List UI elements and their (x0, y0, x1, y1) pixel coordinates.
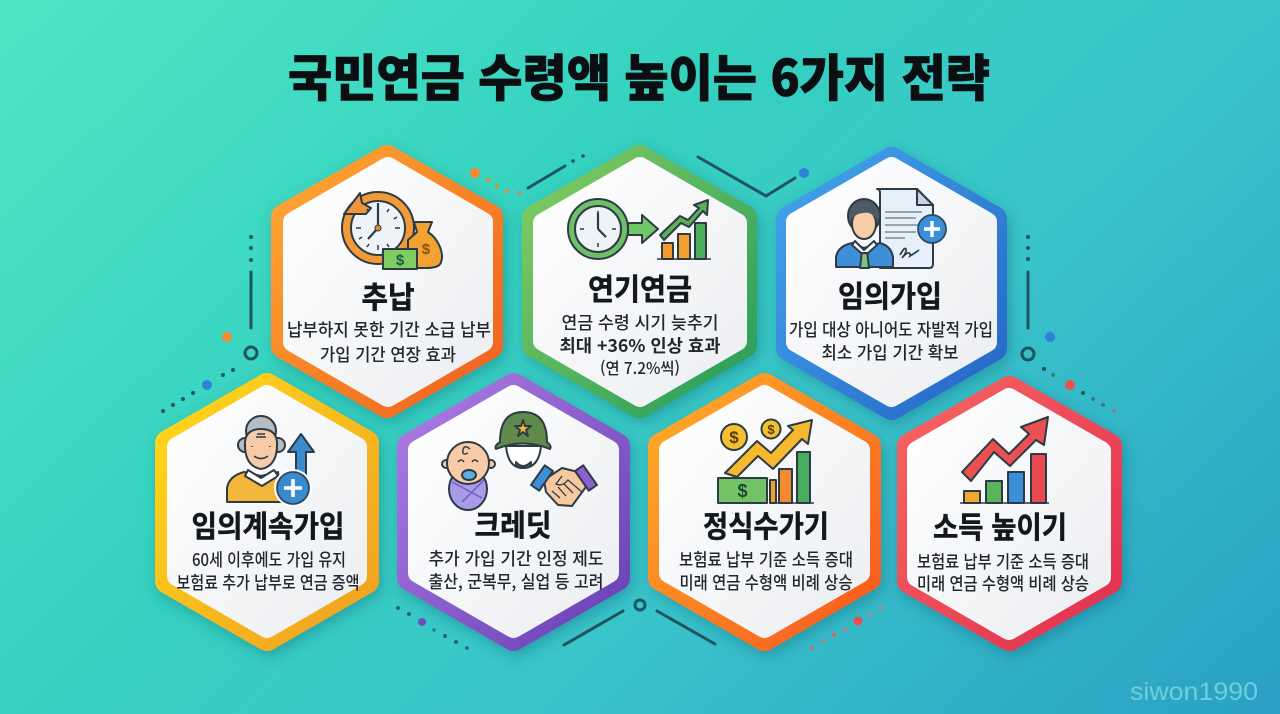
icon: clock with back arrow and money: $ (422, 241, 431, 258)
text: 임의가입 description: 가입 대상 아니어도 자발적 가입 (789, 317, 993, 342)
icon: clock, arrow and rising chart (568, 199, 711, 259)
hexagon frame: yellow (168, 386, 366, 638)
heading: 연기연금: 연기연금 (588, 265, 692, 309)
hexagon frame: orange (284, 158, 490, 405)
text: 정식수가기 description: 미래 연금 수형액 비례 상승 (680, 570, 852, 595)
hexagon frame: green (535, 158, 744, 405)
hexagon frame: orange (661, 386, 868, 638)
text: 크레딧 description (428, 546, 604, 594)
panel: 정식수가기 (661, 386, 868, 638)
text: 소득 높이기 description: 보험료 납부 기준 소득 증대 (917, 549, 1089, 574)
heading: 크레딧: 크레딧 (474, 501, 552, 545)
text: 연기연금 description: 연금 수령 시기 늦추기 (562, 310, 718, 335)
watermark: siwon1990 (1130, 678, 1258, 706)
icon: clock with back arrow and money: $ (396, 252, 405, 269)
text: 연기연금 description: 최대 +36% 인상 효과 (560, 333, 720, 358)
icon: elderly person with up arrow (227, 416, 314, 507)
text: 소득 높이기 description (917, 549, 1089, 596)
hexagon frame: purple (410, 386, 617, 638)
icon: coins, banknote and rising chart (718, 420, 814, 503)
text: 임의가입 description: 최소 가입 기간 확보 (822, 340, 958, 365)
panel: 소득 높이기 (910, 389, 1109, 638)
heading: 추납: 추납 (362, 273, 414, 317)
text: 임의가입 description (789, 317, 993, 365)
heading: 임의계속가입: 임의계속가입 (192, 502, 344, 546)
text: 추납 description: 납부하지 못한 기간 소급 납부 (287, 317, 491, 342)
icon: coins, banknote and rising chart: $ (737, 481, 748, 501)
text: 연기연금 description: (연 7.2%씩) (600, 355, 680, 379)
heading: 임의가입: 임의가입 (838, 272, 942, 316)
icon: clock with back arrow and money (342, 192, 442, 269)
text: 임의계속가입 description: 60세 이후에도 가입 유지 (192, 547, 346, 572)
text: 정식수가기 description (679, 547, 853, 595)
icon: coins, banknote and rising chart: $ (729, 428, 739, 447)
text: 연기연금 description (560, 310, 720, 379)
icon: baby, military helmet and handshake (442, 412, 597, 510)
text: 크레딧 description: 출산, 군복무, 실업 등 고려 (428, 569, 604, 594)
panel: 연기연금 (535, 158, 744, 405)
text: 정식수가기 description: 보험료 납부 기준 소득 증대 (679, 547, 853, 572)
text: 추납 description (287, 317, 491, 367)
text: 크레딧 description: 추가 가입 기간 인정 제도 (428, 546, 604, 571)
hexagon frame: blue (789, 160, 994, 407)
panel: 임의계속가입 (168, 386, 366, 638)
hexagon frame: red (910, 389, 1109, 638)
text: 임의계속가입 description: 보험료 추가 납부로 연금 증액 (176, 570, 360, 595)
panel: 임의가입 (789, 160, 994, 407)
heading: 소득 높이기: 소득 높이기 (933, 503, 1067, 547)
text: 추납 description: 가입 기간 연장 효과 (320, 342, 456, 367)
icon: person with signed document (836, 189, 946, 268)
panel: 추납 (284, 158, 491, 405)
heading: 정식수가기: 정식수가기 (703, 502, 829, 546)
decorative dots and lines (161, 154, 1116, 650)
panel: 크레딧 (410, 386, 617, 638)
text: 임의계속가입 description (176, 547, 360, 595)
icon: coins, banknote and rising chart: $ (767, 422, 775, 437)
text: 소득 높이기 description: 미래 연금 수형액 비례 상승 (917, 571, 1089, 596)
icon: rising bar chart with red arrow (960, 417, 1049, 503)
title: 국민연금 수령액 높이는 6가지 전략 (288, 39, 990, 111)
